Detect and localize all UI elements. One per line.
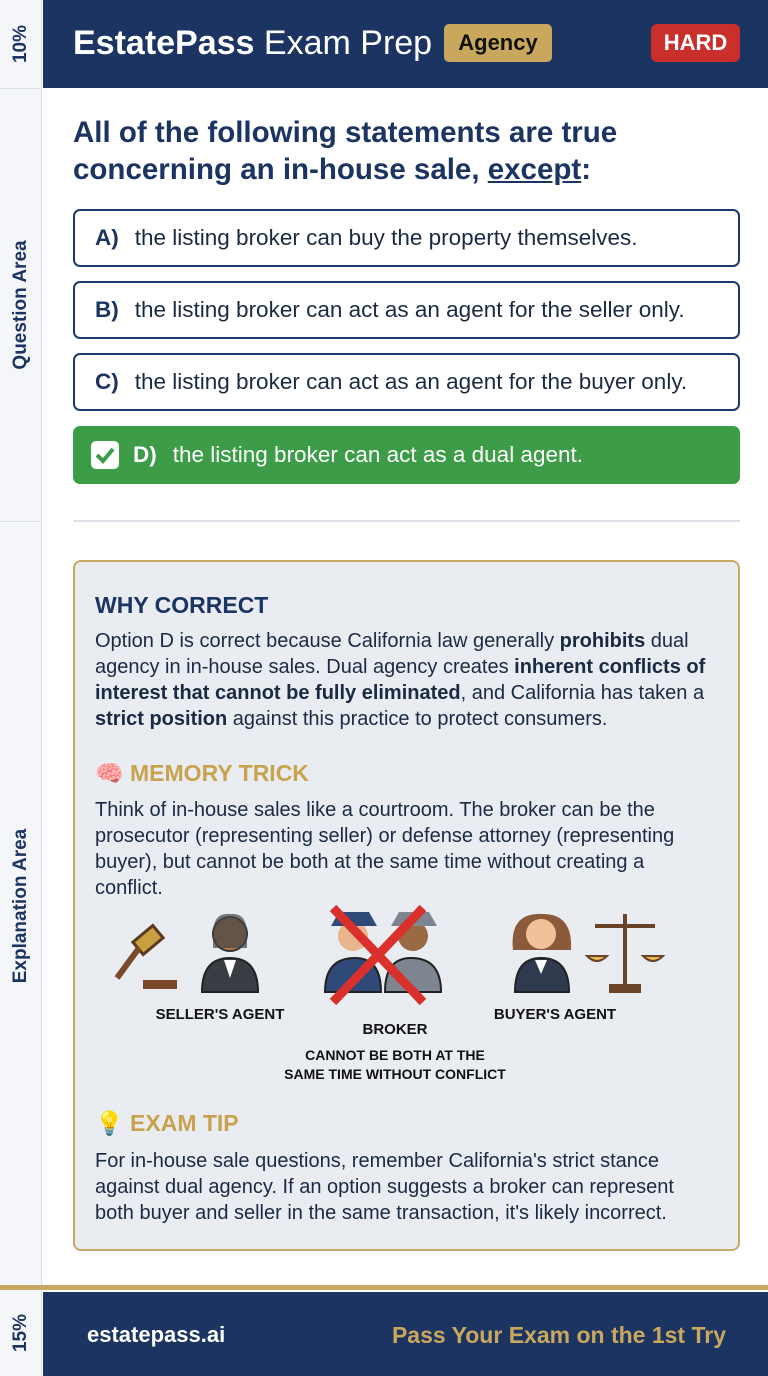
brand title: EstatePass Exam Prep bbox=[73, 24, 432, 62]
badge: agency bbox=[444, 24, 552, 62]
sidebar: top 10%: 10% bbox=[10, 25, 30, 63]
footer bbox=[43, 1292, 768, 1376]
option C: C) bbox=[95, 369, 119, 394]
badge: agency: Agency bbox=[458, 30, 538, 55]
label: broker bbox=[284, 1021, 506, 1082]
option B: the listing broker can act as an agent for the seller only. bbox=[135, 297, 685, 322]
question: All of the following statements are true concerning an in-house sale, except: bbox=[73, 116, 617, 186]
option A bbox=[73, 209, 740, 267]
option B: B) bbox=[95, 297, 119, 322]
icon: scales bbox=[587, 914, 663, 991]
illustration: courtroom bbox=[114, 904, 666, 1006]
label: broker: CANNOT BE BOTH AT THE bbox=[305, 1047, 485, 1063]
text: why correct: Option D is correct because California law generally prohibits dual agency in in-house sales. Dual agency creates inherent conflicts of interest that cannot be fully eliminated, and California has taken a strict position against this practice to protect consumers. bbox=[95, 630, 705, 730]
sidebar: explanation area: Explanation Area bbox=[10, 829, 30, 983]
option A: the listing broker can buy the property themselves. bbox=[135, 225, 638, 250]
icon: gavel bbox=[117, 926, 177, 989]
text: memory trick: Think of in-house sales like a courtroom. The broker can be the prosecutor (representing seller) or defense attorney (representing buyer), but cannot be both at the same time without creating a conflict. bbox=[95, 799, 674, 899]
icon: check bbox=[91, 441, 119, 469]
sidebar: explanation area bbox=[0, 521, 42, 1290]
heading: exam tip: 💡 EXAM TIP bbox=[95, 1110, 239, 1136]
label: seller's agent: SELLER'S AGENT bbox=[156, 1006, 284, 1023]
icon: brokers crossed out bbox=[325, 908, 441, 1002]
sidebar: question area bbox=[0, 88, 42, 521]
icon: buyer agent bbox=[513, 914, 571, 992]
footer brand: estatepass.ai bbox=[87, 1322, 225, 1347]
heading: why correct: WHY CORRECT bbox=[95, 592, 268, 618]
label: broker: BROKER bbox=[362, 1021, 428, 1038]
header bbox=[43, 0, 768, 88]
text: exam tip: For in-house sale questions, remember California's strict stance against dual agency. If an option suggests a broker can represent both buyer and seller in the same transaction, it's likely incorrect. bbox=[95, 1150, 674, 1224]
option B bbox=[73, 281, 740, 339]
sidebar: top 10% bbox=[0, 0, 42, 88]
heading: memory trick: 🧠 MEMORY TRICK bbox=[95, 760, 309, 786]
badge: hard: HARD bbox=[664, 30, 727, 55]
sidebar: question area: Question Area bbox=[10, 240, 30, 370]
option C: the listing broker can act as an agent for the buyer only. bbox=[135, 369, 687, 394]
footer tagline: Pass Your Exam on the 1st Try bbox=[392, 1322, 726, 1348]
explanation panel bbox=[73, 560, 740, 1251]
option D correct bbox=[73, 426, 740, 484]
sidebar: bottom 15%: 15% bbox=[10, 1314, 30, 1352]
label: buyer's agent: BUYER'S AGENT bbox=[494, 1006, 616, 1023]
sidebar: bottom 15% bbox=[0, 1290, 42, 1376]
badge: hard bbox=[651, 24, 740, 62]
option A: A) bbox=[95, 225, 119, 250]
option D correct: D) bbox=[133, 442, 157, 467]
option C bbox=[73, 353, 740, 411]
label: broker: SAME TIME WITHOUT CONFLICT bbox=[284, 1066, 506, 1082]
icon: seller agent bbox=[202, 914, 258, 992]
option D correct: the listing broker can act as a dual agent. bbox=[173, 442, 583, 467]
